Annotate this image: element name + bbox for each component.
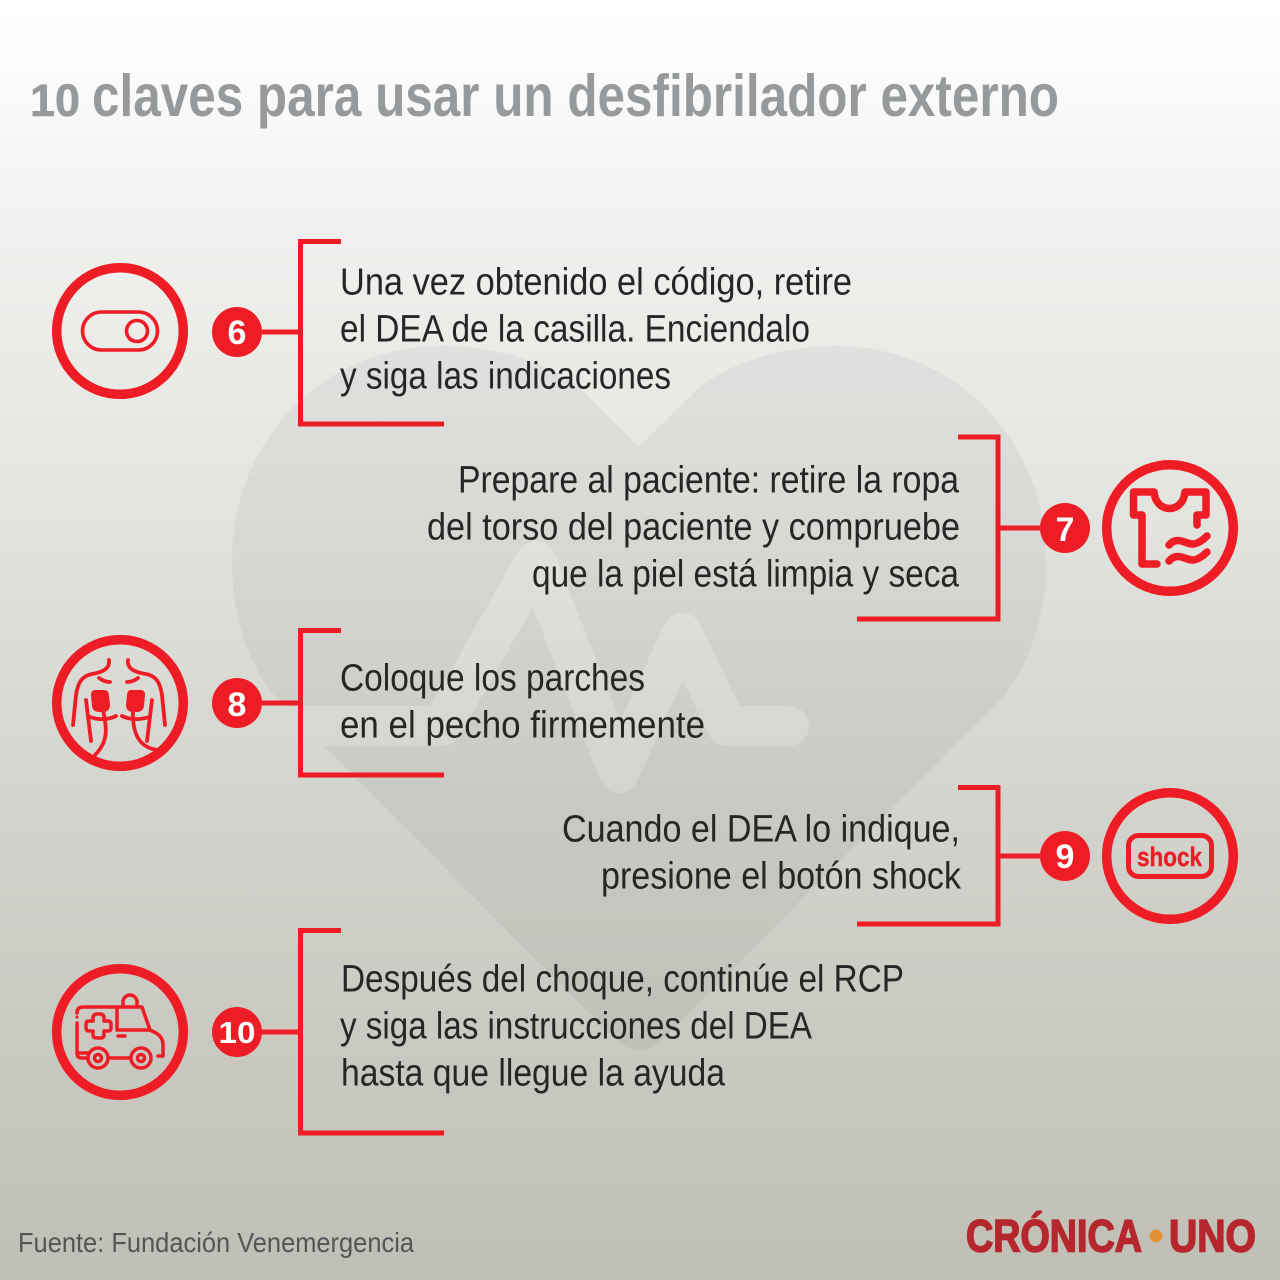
step 7 [427,437,1233,619]
text 7: que la piel está limpia y seca [532,554,960,596]
number badge 8 [212,678,262,728]
text 9 [562,808,962,898]
text 7 [427,460,960,596]
number badge 7: 7 [1056,511,1074,549]
icon: power switch [57,268,183,394]
bracket 10 [262,930,444,1133]
text 7: Prepare al paciente: retire la ropa [458,460,960,502]
icon: shock button [1107,793,1233,919]
number badge 7 [1040,503,1090,553]
heart with ECG line watermark [232,346,1046,1050]
number badge 10 [212,1007,262,1057]
bracket 7 [857,437,1040,619]
text 10: Después del choque, continúe el RCP [341,958,904,1000]
text 7: del torso del paciente y compruebe [427,506,960,548]
logo: Crónica Uno: UNO [1169,1210,1256,1262]
text 8: en el pecho firmemente [340,704,705,746]
number badge 9 [1040,831,1090,881]
bracket 8 [262,630,444,775]
logo: Crónica Uno: CRÓNICA [966,1210,1142,1262]
bracket 9 [857,788,1040,924]
step 10 [57,930,904,1133]
text 10: hasta que llegue la ayuda [341,1052,726,1094]
step 9 [562,788,1233,924]
number badge 9: 9 [1056,838,1074,876]
text 9: presione el botón shock [601,856,962,898]
number badge 6 [212,307,262,357]
text 8: Coloque los parches [340,658,645,700]
source note: Fuente: Fundación Venemergencia [18,1227,414,1258]
text 6: Una vez obtenido el código, retire [340,262,852,304]
text 6: el DEA de la casilla. Enciendalo [340,308,810,350]
number badge 10: 10 [218,1015,256,1050]
text 9: Cuando el DEA lo indique, [562,808,960,850]
number badge 8: 8 [228,686,246,724]
text 8 [340,658,705,746]
text 10 [340,958,904,1094]
bracket 6 [262,242,444,424]
text 6 [340,262,852,398]
title: claves para usar un desfibrilador externo [92,63,1059,129]
number badge 6: 6 [228,314,246,352]
step 6 [57,242,852,424]
text 10: y siga las instrucciones del DEA [340,1006,813,1048]
text 6: y siga las indicaciones [340,356,671,398]
icon: ambulance [57,969,183,1095]
step 8 [57,630,705,775]
icon: torso with pads [57,640,183,766]
icon: shock button: shock [1137,842,1203,872]
title: 10 [30,75,80,126]
icon: shirt and wet skin [1107,465,1233,591]
